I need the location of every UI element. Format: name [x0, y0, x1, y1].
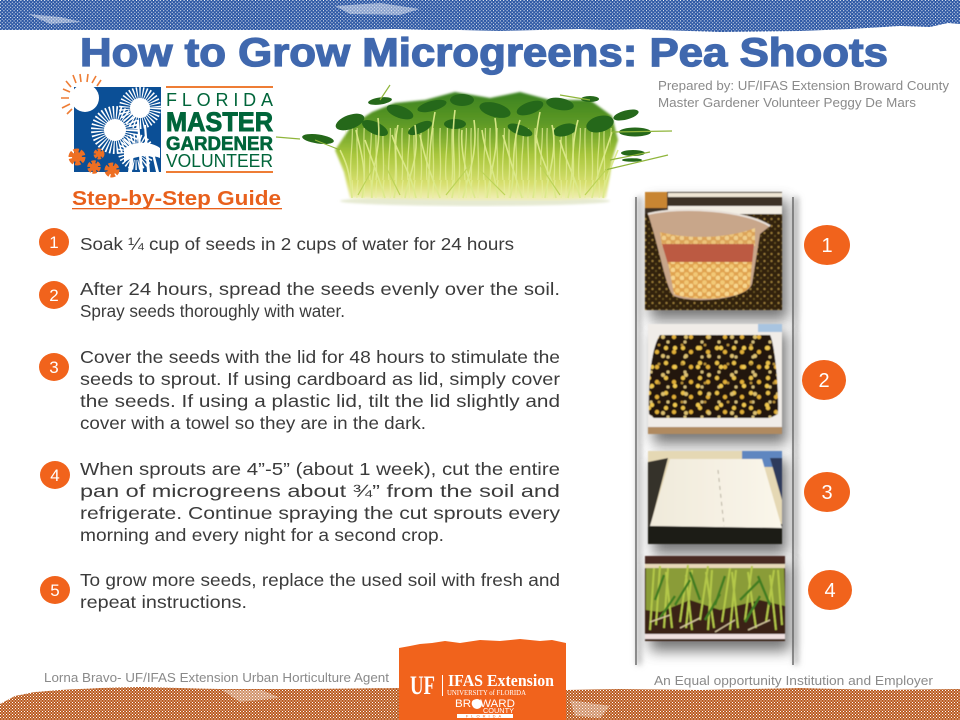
logo: Florida Master Gardener Volunteer: MASTER	[166, 107, 273, 137]
footer: author credit: Lorna Bravo- UF/IFAS Extension Urban Horticulture Agent	[44, 671, 390, 685]
badge 4	[40, 461, 70, 489]
step 1	[39, 228, 514, 256]
step 4	[40, 459, 560, 545]
heading: step-by-step guide: Step-by-Step Guide	[72, 188, 281, 210]
photo 4: grown sprouts in tray	[645, 556, 790, 651]
step 2: Spray seeds thoroughly with water.	[80, 301, 345, 321]
icon: sun	[61, 74, 101, 114]
badges beside photos	[802, 225, 852, 610]
title: How to Grow Microgreens: Pea Shoots	[80, 31, 888, 75]
credit: prepared by: Prepared by: UF/IFAS Extension Broward County	[658, 79, 950, 93]
photo badge 2: 2	[818, 370, 830, 392]
photo badge 4	[808, 570, 852, 610]
badge 5: 5	[50, 581, 60, 600]
step 3: Cover the seeds with the lid for 48 hours to stimulate the	[80, 347, 560, 367]
photo badge 3: 3	[821, 482, 833, 504]
step 4: refrigerate. Continue spraying the cut sprouts every	[80, 503, 560, 523]
sub-element: dark leaves	[302, 94, 651, 162]
badge 3	[39, 353, 69, 381]
badge 4: 4	[50, 466, 60, 485]
icon: palm fans	[98, 93, 160, 172]
step 4: When sprouts are 4”-5” (about 1 week), cut the entire	[80, 459, 560, 479]
badge 5	[40, 576, 70, 604]
UF IFAS Extension logo block: FLORIDA	[466, 714, 504, 718]
step 5	[40, 570, 560, 612]
photo 3: cardboard lid over pan	[648, 451, 787, 554]
step 2: After 24 hours, spread the seeds evenly over the soil.	[80, 279, 560, 299]
step 3: cover with a towel so they are in the dark.	[80, 413, 426, 433]
UF IFAS Extension logo block: IFAS Extension	[448, 671, 555, 690]
UF IFAS Extension logo block: UNIVERSITY of FLORIDA	[447, 688, 527, 697]
photo badge 2	[802, 360, 846, 400]
footer: equal opportunity: An Equal opportunity Institution and Employer	[654, 674, 933, 688]
badge 3: 3	[49, 358, 59, 377]
logo: Florida Master Gardener Volunteer: GARDENER	[166, 134, 273, 155]
step 3: the seeds. If using a plastic lid, tilt the lid slightly and	[80, 391, 560, 411]
step 3: seeds to sprout. If using cardboard as lid, simply cover	[80, 369, 560, 389]
step 4: morning and every night for a second crop.	[80, 525, 444, 545]
badge 2	[39, 281, 69, 309]
UF IFAS Extension logo block: BROWARD	[455, 698, 515, 710]
step 1: Soak ¼ cup of seeds in 2 cups of water for 24 hours	[80, 234, 514, 254]
badge 1	[39, 228, 69, 256]
credit: prepared by	[658, 79, 950, 110]
step 5: To grow more seeds, replace the used soil with fresh and	[80, 570, 560, 590]
step 2	[39, 279, 560, 321]
photo 2: seeds spread over soil in pan	[648, 324, 787, 444]
photo badge 1: 1	[821, 235, 833, 257]
top blue halftone band	[0, 0, 960, 32]
photo 1: seeds soaking in measuring cup	[645, 192, 788, 320]
badge 2: 2	[49, 286, 59, 305]
step 5: repeat instructions.	[80, 592, 247, 612]
sub-element: pale stems	[340, 110, 618, 198]
step 4: pan of microgreens about ¾” from the soil and	[80, 481, 560, 501]
UF IFAS Extension logo block: COUNTY	[483, 708, 514, 715]
credit: prepared by: Master Gardener Volunteer Peggy De Mars	[658, 96, 916, 110]
bottom orange halftone band	[0, 687, 960, 720]
UF IFAS Extension logo block	[399, 639, 566, 720]
step 3	[39, 347, 560, 433]
image: pea shoots	[276, 85, 672, 206]
logo: Florida Master Gardener Volunteer: FLORIDA	[166, 90, 273, 110]
badge 1: 1	[49, 233, 59, 252]
icon: orange flowers	[72, 151, 116, 174]
UF IFAS Extension logo block: UF	[410, 671, 435, 700]
logo: Florida Master Gardener Volunteer	[61, 74, 273, 174]
photo badge 4: 4	[824, 580, 836, 602]
logo: Florida Master Gardener Volunteer: VOLUNTEER	[166, 151, 273, 171]
photo badge 3	[804, 472, 850, 512]
photo badge 1	[804, 225, 850, 265]
photo strip rails	[636, 197, 796, 665]
